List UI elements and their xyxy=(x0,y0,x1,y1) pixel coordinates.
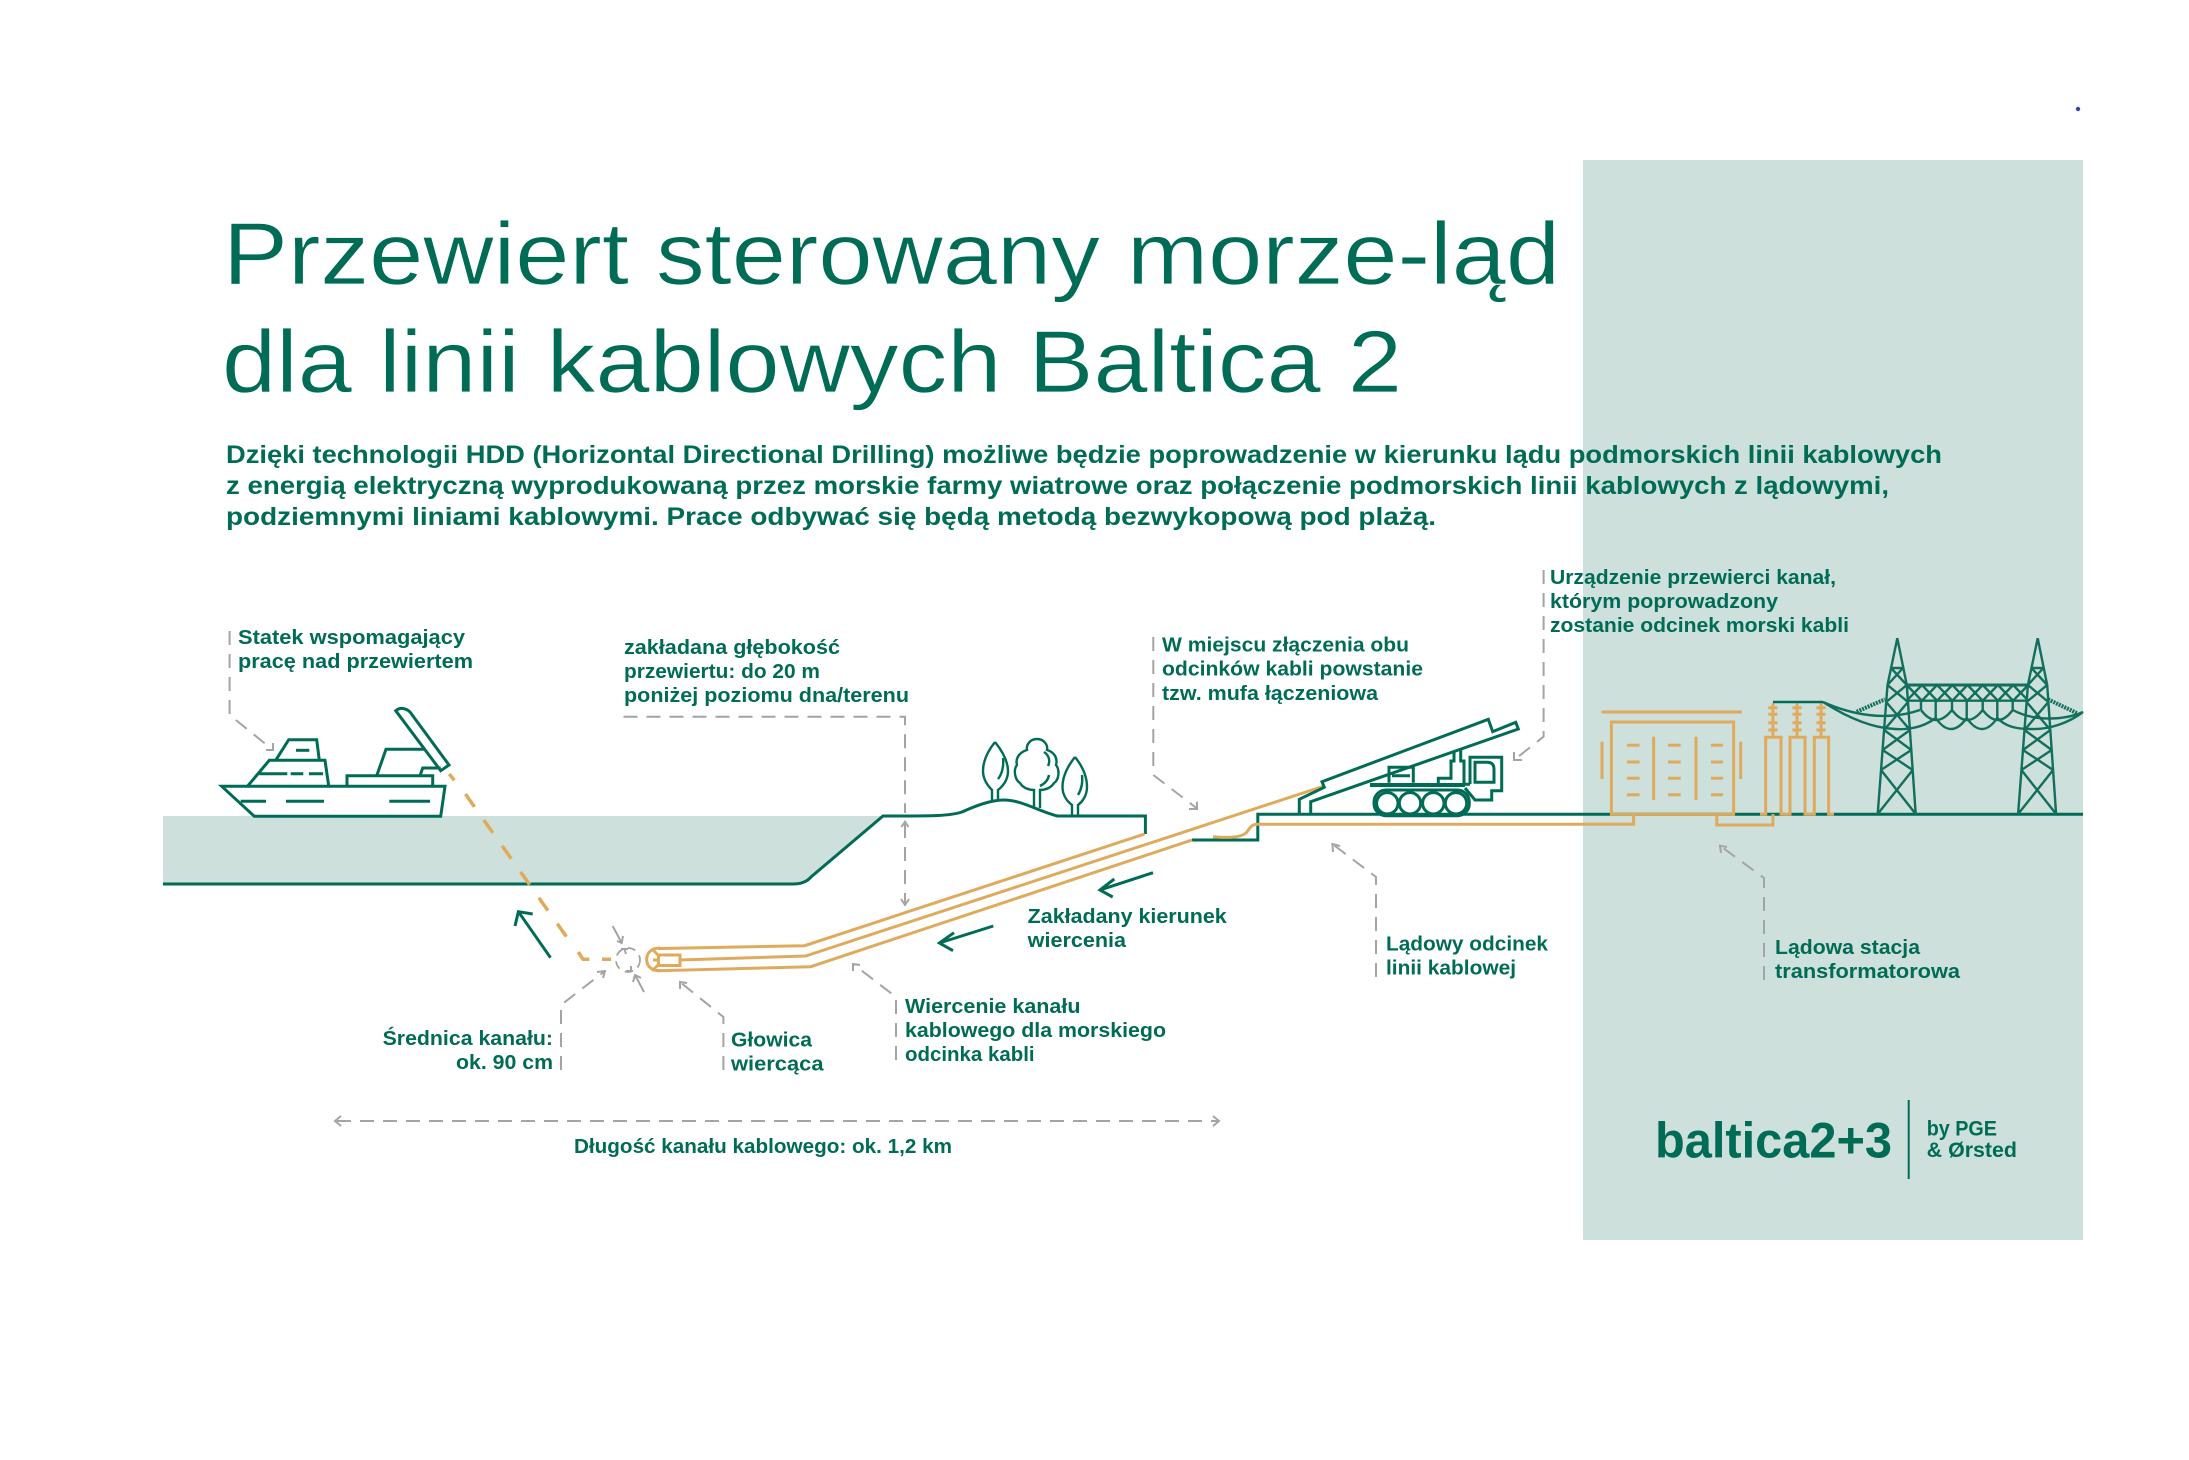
label: channel diameter: Średnica kanału: xyxy=(383,1026,553,1050)
arrow: exit direction xyxy=(515,912,550,958)
title xyxy=(222,204,1560,411)
icon: transformer station xyxy=(1601,703,1834,825)
label: drilling device: zostanie odcinek morski kabli xyxy=(1550,614,1849,637)
title: Przewiert sterowany morze-ląd xyxy=(223,204,1560,303)
label: drilling direction: Zakładany kierunek xyxy=(1028,905,1227,928)
label: joint: W miejscu złączenia obu xyxy=(1162,634,1409,657)
label: transformer station: transformatorowa xyxy=(1775,960,1961,983)
icon: drilling rig xyxy=(1299,719,1518,816)
label: drilling direction: wiercenia xyxy=(1027,929,1127,952)
leader: depth xyxy=(624,717,909,905)
icon: ship xyxy=(222,708,449,816)
label: drilling direction xyxy=(1027,905,1227,952)
label: depth: przewiertu: do 20 m xyxy=(624,660,820,683)
label: depth: zakładana głębokość xyxy=(624,636,840,659)
label: joint xyxy=(1162,634,1423,705)
leader: ship xyxy=(230,631,273,750)
label: channel length: Długość kanału kablowego: ok. 1,2 km xyxy=(574,1135,952,1158)
cable channel: sea section xyxy=(647,786,1324,971)
icon: diameter marker xyxy=(613,926,644,992)
leader: channel diameter xyxy=(561,971,605,1070)
intro text block xyxy=(226,441,1942,531)
label: drilling device: Urządzenie przewierci kanał, xyxy=(1550,566,1836,589)
icon: power pylons xyxy=(1773,638,2083,814)
icon: drill head xyxy=(652,949,680,971)
leader: joint xyxy=(1153,637,1198,809)
logo: by PGE xyxy=(1927,1118,1997,1141)
label: joint: odcinków kabli powstanie xyxy=(1162,658,1423,681)
label: channel drilling: Wiercenie kanału xyxy=(905,995,1080,1018)
label: channel drilling: odcinka kabli xyxy=(905,1043,1035,1066)
seabed and land line xyxy=(163,800,1145,884)
label: land cable xyxy=(1386,933,1549,980)
label: channel drilling: kablowego dla morskiego xyxy=(905,1019,1166,1042)
label: transformer station xyxy=(1775,936,1961,983)
label: channel diameter xyxy=(383,1026,553,1074)
intro text block: Dzięki technologii HDD (Horizontal Directional Drilling) możliwe będzie poprowadzenie w kierunku lądu podmorskich linii kablowych xyxy=(226,441,1942,469)
icon: trees xyxy=(983,739,1087,816)
arrow: drilling direction lower xyxy=(939,926,993,951)
label: channel diameter: ok. 90 cm xyxy=(456,1051,553,1074)
dashed pilot route to the ship xyxy=(449,774,611,959)
dimension line: channel length xyxy=(335,1116,1219,1126)
leader: drilling device xyxy=(1514,570,1544,760)
arrow: drilling direction upper xyxy=(1100,873,1153,897)
logo: baltica2+3 xyxy=(1655,1112,1892,1168)
label: depth: poniżej poziomu dna/terenu xyxy=(624,684,909,707)
label: ship: Statek wspomagający xyxy=(238,626,466,649)
label: ship xyxy=(238,626,473,673)
ground right of the drill site xyxy=(1192,814,2083,840)
title: dla linii kablowych Baltica 2 xyxy=(222,312,1402,411)
label: drill head: Głowica xyxy=(731,1029,813,1052)
label: ship: pracę nad przewiertem xyxy=(238,650,473,673)
label: drilling device: którym poprowadzony xyxy=(1550,590,1779,613)
leader: channel drilling xyxy=(853,964,896,1060)
label: channel drilling xyxy=(905,995,1166,1066)
panel: right tinted background xyxy=(1583,160,2083,1240)
label: depth xyxy=(624,636,909,707)
label: drill head xyxy=(730,1029,824,1076)
leader: drill head xyxy=(680,982,723,1070)
intro text block: podziemnymi liniami kablowymi. Prace odbywać się będą metodą bezwykopową pod plażą. xyxy=(226,503,1436,531)
label: drill head: wiercąca xyxy=(730,1053,824,1076)
logo xyxy=(1655,1100,2017,1179)
sea xyxy=(163,816,883,884)
intro text block: z energią elektryczną wyprodukowaną przez morskie farmy wiatrowe oraz połączenie podmorskich linii kablowych z lądowymi, xyxy=(226,472,1889,500)
label: land cable: linii kablowej xyxy=(1386,957,1516,980)
decorative blue dot xyxy=(2076,107,2080,111)
label: transformer station: Lądowa stacja xyxy=(1775,936,1921,959)
label: joint: tzw. mufa łączeniowa xyxy=(1162,682,1379,705)
label: land cable: Lądowy odcinek xyxy=(1386,933,1549,956)
leader: transformer station xyxy=(1720,846,1764,980)
logo: & Ørsted xyxy=(1927,1139,2017,1162)
leader: land cable xyxy=(1332,844,1376,977)
label: drilling device xyxy=(1550,566,1849,637)
land cable xyxy=(1213,814,1634,837)
